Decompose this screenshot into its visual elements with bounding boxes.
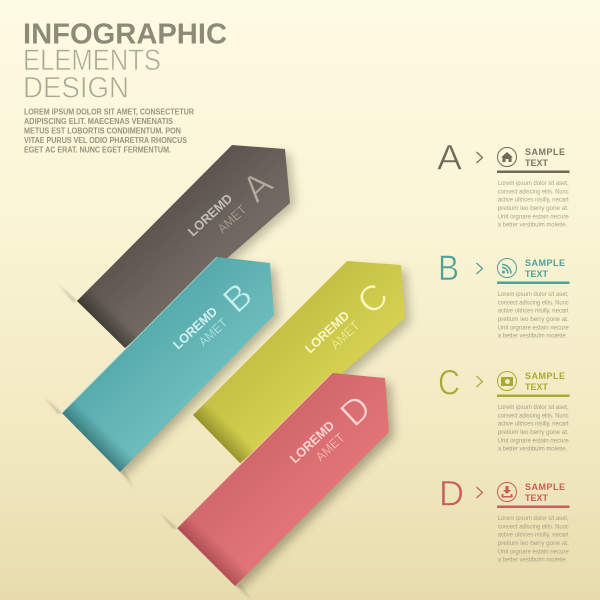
bar B xyxy=(497,282,570,284)
sample text D xyxy=(525,482,565,503)
chevron B xyxy=(476,263,482,274)
arrow A: AMET xyxy=(214,202,250,236)
sample text B: SAMPLE xyxy=(525,258,565,268)
bar D xyxy=(497,506,570,508)
body text B: pretium leo berry gone at. xyxy=(498,316,569,323)
body text A: a better vestibulm moletie. xyxy=(498,222,567,229)
sample text D: SAMPLE xyxy=(525,482,565,492)
sample text A xyxy=(525,147,565,168)
body text B: consect adiscing elits. Nunc xyxy=(498,299,569,306)
body text C: Unit orgnare estain necure xyxy=(498,437,569,444)
letter C: C xyxy=(349,275,396,322)
body text C xyxy=(498,404,569,453)
intro paragraph: EGET AC ERAT. NUNC EGET FERMENTUM. xyxy=(24,146,171,154)
legend item D xyxy=(439,474,570,564)
body text B xyxy=(498,291,569,340)
letter B: B xyxy=(215,274,260,321)
body text A xyxy=(498,180,569,229)
big letter C: C xyxy=(438,364,460,402)
arrow B xyxy=(44,257,279,488)
label: loremd amet C: LOREMD xyxy=(302,308,352,356)
icon: camera xyxy=(498,372,516,390)
arrow B: AMET xyxy=(195,315,231,349)
icon: rss xyxy=(498,258,516,278)
sample text B xyxy=(525,258,565,279)
title block xyxy=(23,18,227,104)
big letter D: D xyxy=(439,474,464,514)
intro paragraph xyxy=(24,108,194,154)
body text D: active ultrices nisilly, necart xyxy=(498,532,569,539)
body text D: consect adiscing elits. Nunc xyxy=(498,523,569,530)
body text C: active ultrices nisilly, necart xyxy=(498,421,569,428)
body text B: Unit orgnare estain necure xyxy=(498,324,569,331)
body text A: Unit orgnare estain necure xyxy=(498,213,569,220)
body text D: Unit orgnare estain necure xyxy=(498,548,569,555)
arrow A xyxy=(57,145,295,352)
intro paragraph: LOREM IPSUM DOLOR SIT AMET, CONSECTETUR xyxy=(24,108,194,116)
body text D: Lorem ipsum dolor sit aset, xyxy=(498,515,569,522)
heading: infographic: INFOGRAPHIC xyxy=(23,18,227,50)
sample text C: TEXT xyxy=(525,382,548,392)
intro paragraph: VITAE PURUS VEL ODIO PHARETRA RHONCUS xyxy=(24,136,188,145)
chevron C xyxy=(476,376,482,387)
arrow C: AMET xyxy=(327,318,363,352)
legend item B xyxy=(438,249,570,340)
heading: elements: ELEMENTS xyxy=(23,44,161,77)
body text C: consect adiscing elits. Nunc xyxy=(498,412,569,419)
label: loremd amet A: LOREMD xyxy=(185,191,235,239)
letter D: D xyxy=(332,387,379,434)
chevron A xyxy=(476,152,482,163)
body text A: pretium leo berry gone at. xyxy=(498,205,569,212)
heading: design: DESIGN xyxy=(23,72,129,104)
body text C: pretium leo berry gone at. xyxy=(498,429,569,436)
arrow D: AMET xyxy=(312,430,348,464)
icon: home xyxy=(498,148,516,166)
arrow D xyxy=(160,373,394,600)
body text B: Lorem ipsum dolor sit aset, xyxy=(498,291,569,298)
body text A: consect adiscing elits. Nunc xyxy=(498,188,569,195)
sample text D: TEXT xyxy=(525,493,548,503)
intro paragraph: ADIPISCING ELIT. MAECENAS VENENATIS xyxy=(24,117,174,126)
sample text A: TEXT xyxy=(525,158,548,168)
big letter A: A xyxy=(437,138,463,178)
sample text C xyxy=(525,371,565,392)
sample text C: SAMPLE xyxy=(525,371,565,381)
big letter B: B xyxy=(438,249,459,288)
intro paragraph: METUS EST LOBORTIS CONDIMENTUM. PON xyxy=(24,126,181,136)
body text D: pretium leo berry gone at. xyxy=(498,540,569,547)
chevron D xyxy=(476,487,482,498)
legend item C xyxy=(438,364,570,453)
body text C: Lorem ipsum dolor sit aset, xyxy=(498,404,569,411)
body text D xyxy=(498,515,569,564)
bar C xyxy=(497,394,570,397)
sample text A: SAMPLE xyxy=(525,147,565,157)
body text B: active ultrices nisilly, necart xyxy=(498,308,569,315)
icon: download xyxy=(498,482,516,502)
label: loremd amet B: LOREMD xyxy=(170,304,220,352)
legend item A xyxy=(437,138,570,229)
body text B: a better vestibulm moletie. xyxy=(498,333,567,340)
body text C: a better vestibulm moletie. xyxy=(498,446,567,453)
body text A: Lorem ipsum dolor sit aset, xyxy=(498,180,569,187)
label: loremd amet D: LOREMD xyxy=(287,418,337,466)
body text D: a better vestibulm moletie. xyxy=(498,557,567,564)
sample text B: TEXT xyxy=(525,269,548,279)
body text A: active ultrices nisilly, necart xyxy=(498,197,569,204)
letter A: A xyxy=(234,163,281,210)
bar A xyxy=(497,170,570,173)
arrow C xyxy=(193,261,410,468)
